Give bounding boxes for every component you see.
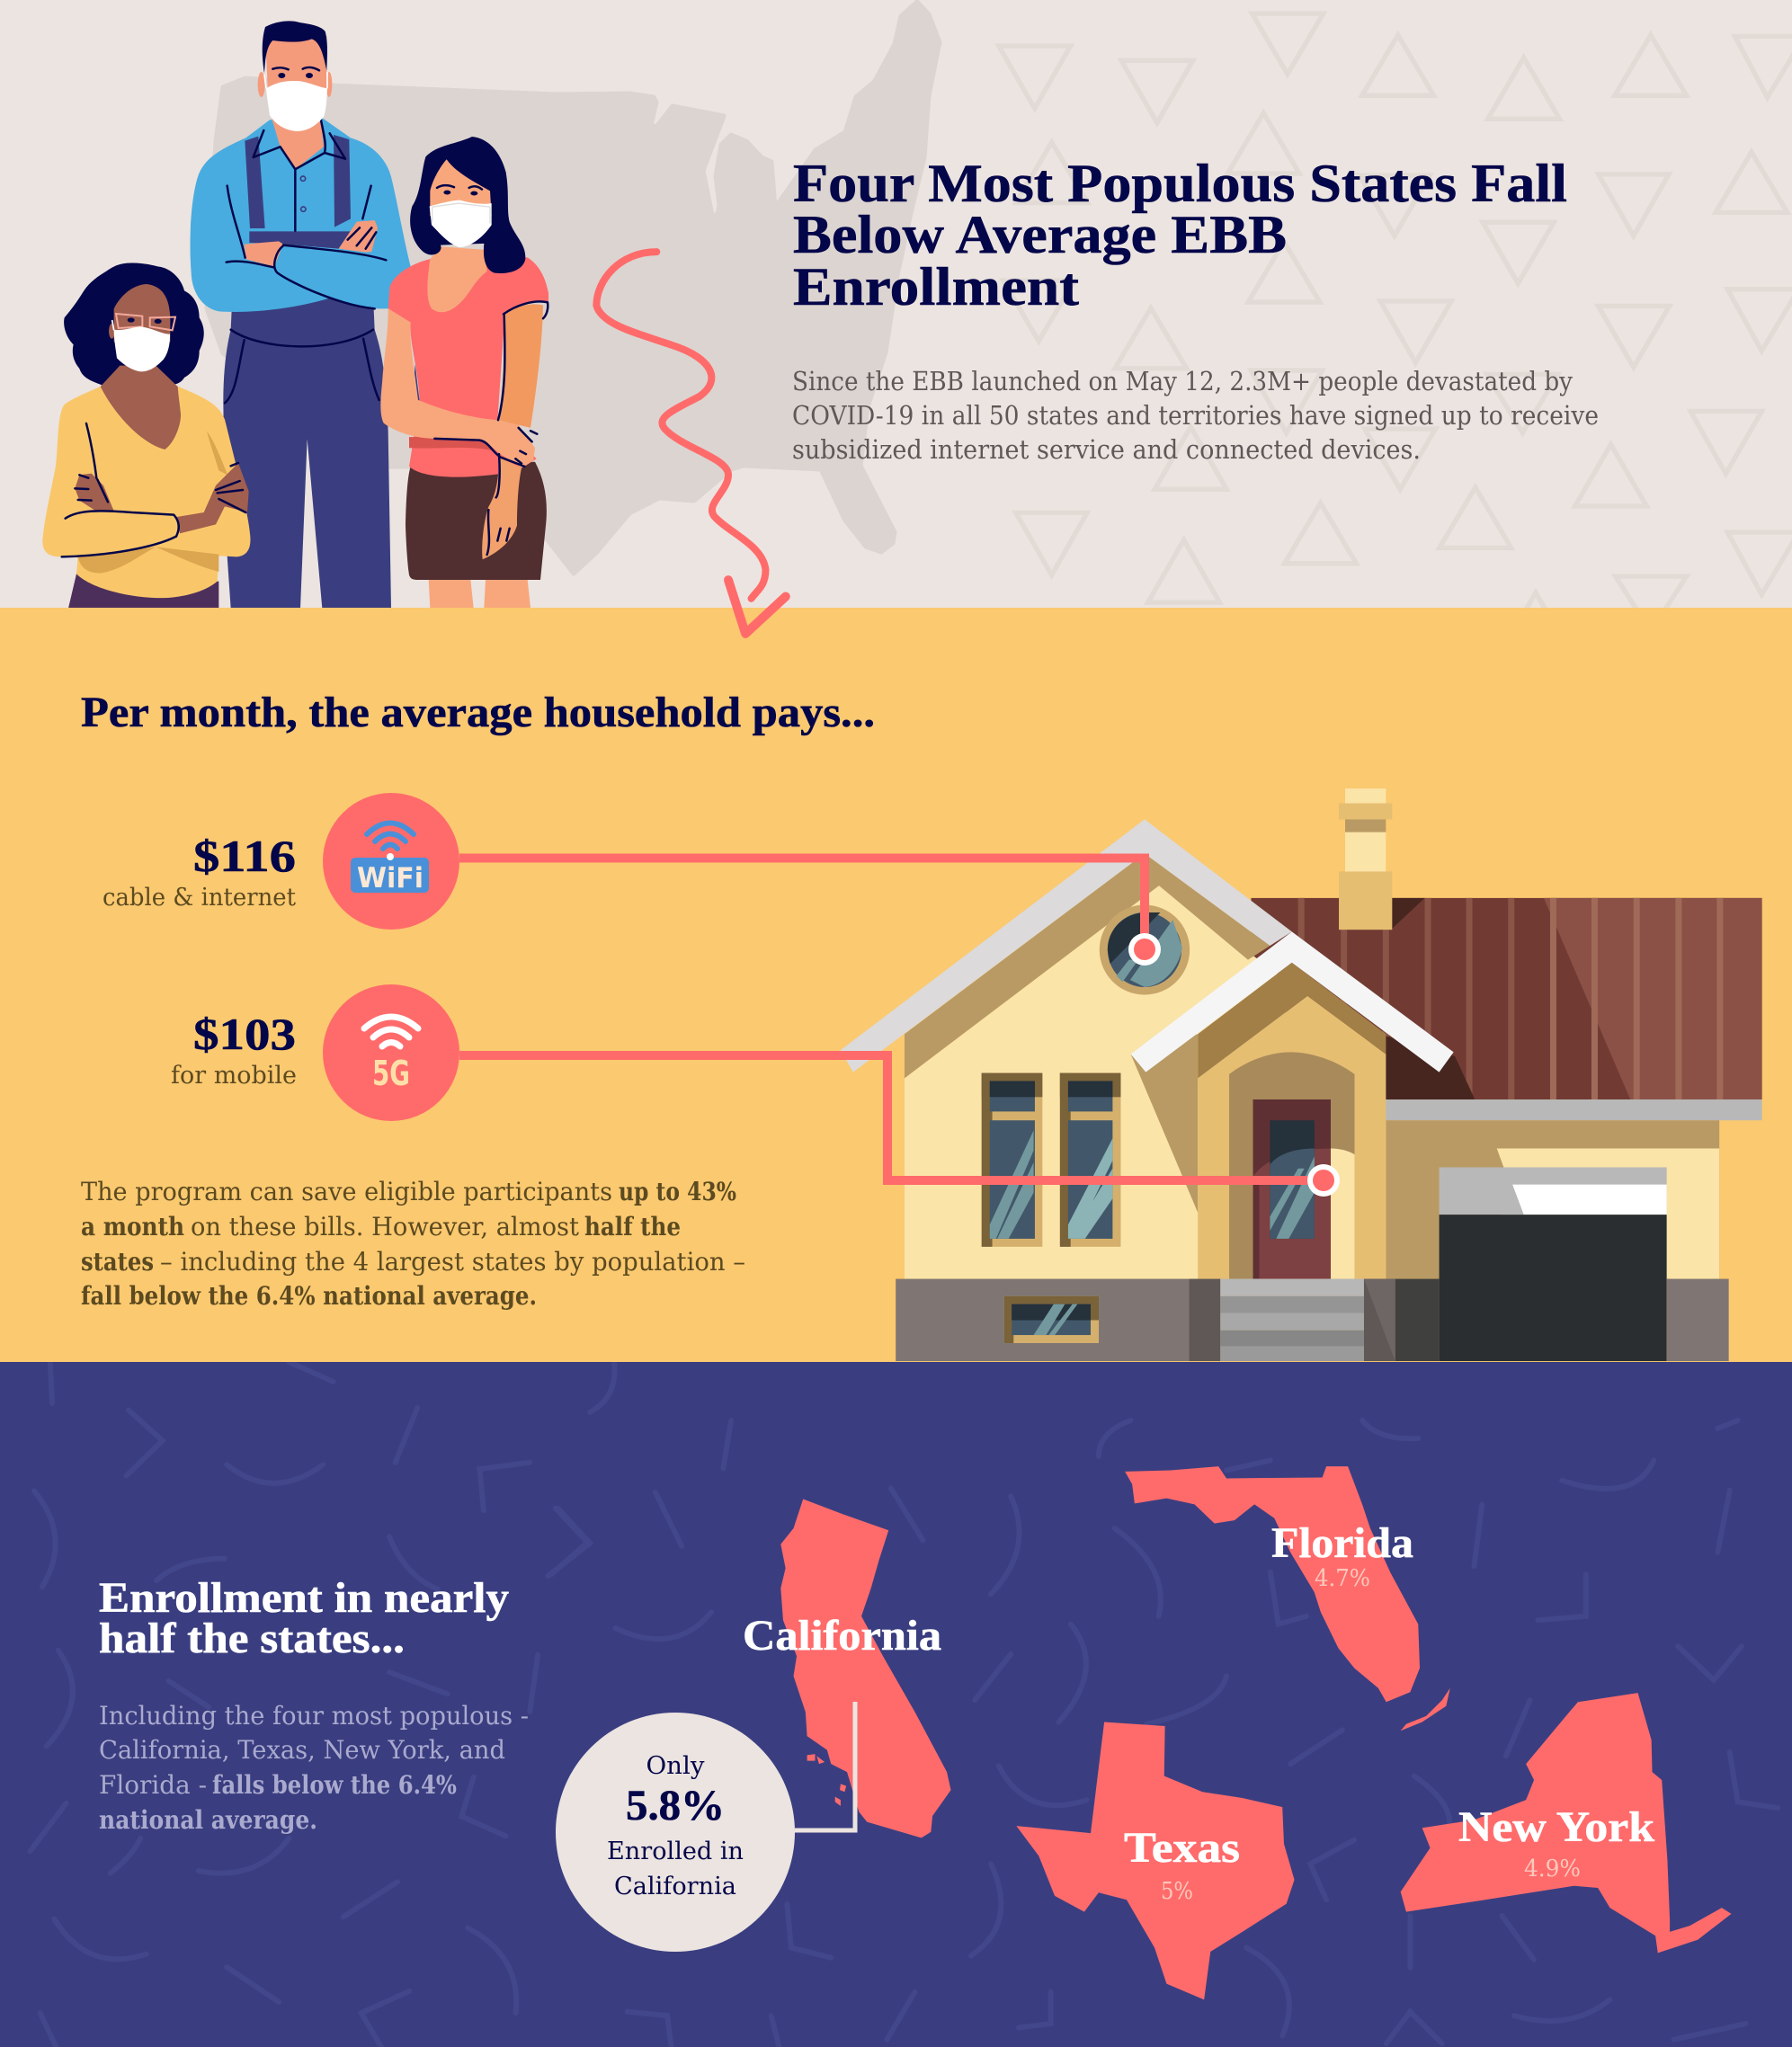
stat: mobile: $103 [193, 1009, 296, 1059]
text block: savings paragraph: half the [584, 1212, 681, 1242]
map: California [780, 1500, 951, 1838]
heading: main title [793, 154, 1567, 316]
label: Texas [1124, 1824, 1240, 1905]
man trousers [223, 297, 391, 609]
text block: savings paragraph: The program can save eligible participants [81, 1177, 612, 1206]
callout: only 5.8% enrolled in California: California [614, 1873, 736, 1900]
heading: per month: Per month, the average household pays... [81, 689, 875, 736]
stat: cable and internet [103, 831, 296, 912]
garage [1386, 1120, 1719, 1361]
label: Florida: Florida [1271, 1519, 1413, 1567]
label: Florida: 4.7% [1315, 1565, 1370, 1592]
label: New York [1458, 1803, 1654, 1882]
person: woman in coral top [380, 137, 548, 608]
label: New York: New York [1458, 1803, 1654, 1851]
main house gable [841, 819, 1292, 1279]
text block: enrollment paragraph: falls below the 6.4% [212, 1770, 457, 1800]
label: Texas: Texas [1124, 1824, 1240, 1872]
text block: intro paragraph: Since the EBB launched on May 12, 2.3M+ people devastated by [792, 366, 1574, 396]
label: New York: 4.9% [1524, 1856, 1581, 1882]
label: Texas: 5% [1161, 1878, 1193, 1905]
heading: enrollment in nearly half the states: Enrollment in nearly [99, 1574, 509, 1622]
background triangles pattern [999, 13, 1792, 655]
callout: only 5.8% enrolled in California [556, 1713, 795, 1952]
heading: main title: Enrollment [793, 257, 1079, 316]
text block: savings paragraph: states [81, 1247, 154, 1277]
icon: 5G [323, 984, 459, 1121]
panel: household costs [0, 608, 1792, 1362]
front porch gable [1131, 931, 1454, 1279]
illustration: three masked people [42, 21, 548, 609]
heading: enrollment in nearly half the states [99, 1574, 509, 1662]
house roof at rear [1251, 898, 1762, 1120]
text block: intro paragraph: subsidized internet service and connected devices. [792, 434, 1421, 465]
label: Florida [1271, 1519, 1413, 1592]
connector: California callout line [795, 1702, 855, 1830]
stat: mobile [171, 1009, 297, 1090]
text block: savings paragraph [81, 1177, 745, 1311]
text block: intro paragraph [792, 366, 1599, 465]
icon: wifi: WiFi [357, 862, 423, 894]
map: Texas [1016, 1722, 1295, 1999]
text block: enrollment paragraph [99, 1701, 529, 1835]
text block: enrollment paragraph: Including the four most populous - [99, 1701, 529, 1731]
text block: savings paragraph: a month [81, 1212, 184, 1242]
heading: enrollment in nearly half the states: half the states... [99, 1615, 405, 1662]
text block: intro paragraph: COVID-19 in all 50 states and territories have signed up to receive [792, 400, 1599, 431]
map: New York [1401, 1693, 1731, 1953]
text block: savings paragraph: – including the 4 largest states by population – [160, 1247, 745, 1277]
text block: savings paragraph: up to 43% [619, 1177, 736, 1206]
text block: savings paragraph: on these bills. However, almost [191, 1212, 580, 1242]
arrow: squiggle pointing down [596, 252, 786, 634]
label: California: California [743, 1612, 941, 1660]
stat: cable and internet: cable & internet [103, 884, 296, 912]
text block: savings paragraph: fall below the 6.4% national average. [81, 1281, 537, 1311]
icon: wifi [323, 793, 459, 930]
icon: 5G: 5G [372, 1054, 410, 1093]
callout: only 5.8% enrolled in California: 5.8% [626, 1782, 725, 1829]
text block: enrollment paragraph: California, Texas, New York, and [99, 1735, 505, 1765]
background dashes [27, 1362, 1780, 2047]
connector: internet line to attic window [459, 858, 1161, 966]
man upper body and head [190, 21, 411, 312]
person: man in overalls [190, 21, 411, 609]
callout: only 5.8% enrolled in California: Only [646, 1752, 705, 1780]
heading: main title: Below Average EBB [793, 205, 1287, 264]
round attic window [1100, 905, 1190, 995]
connector: mobile line to door [459, 1055, 1340, 1197]
panel: enrollment by state [0, 1362, 1792, 2047]
illustration: house [841, 788, 1762, 1361]
chimney [1339, 788, 1392, 930]
map: Florida [1125, 1466, 1450, 1731]
stat: mobile: for mobile [171, 1062, 297, 1090]
panel: top intro [0, 0, 1792, 655]
background US map silhouette [207, 2, 940, 574]
heading: main title: Four Most Populous States Fall [793, 154, 1567, 213]
foundation and steps [896, 1279, 1729, 1361]
text block: enrollment paragraph: Florida - [99, 1770, 207, 1800]
callout: only 5.8% enrolled in California: Enrolled in [607, 1838, 744, 1865]
tall windows [982, 1073, 1120, 1247]
stat: cable and internet: $116 [193, 831, 296, 881]
text block: enrollment paragraph: national average. [99, 1805, 317, 1835]
person: woman in yellow sweater [42, 263, 250, 609]
